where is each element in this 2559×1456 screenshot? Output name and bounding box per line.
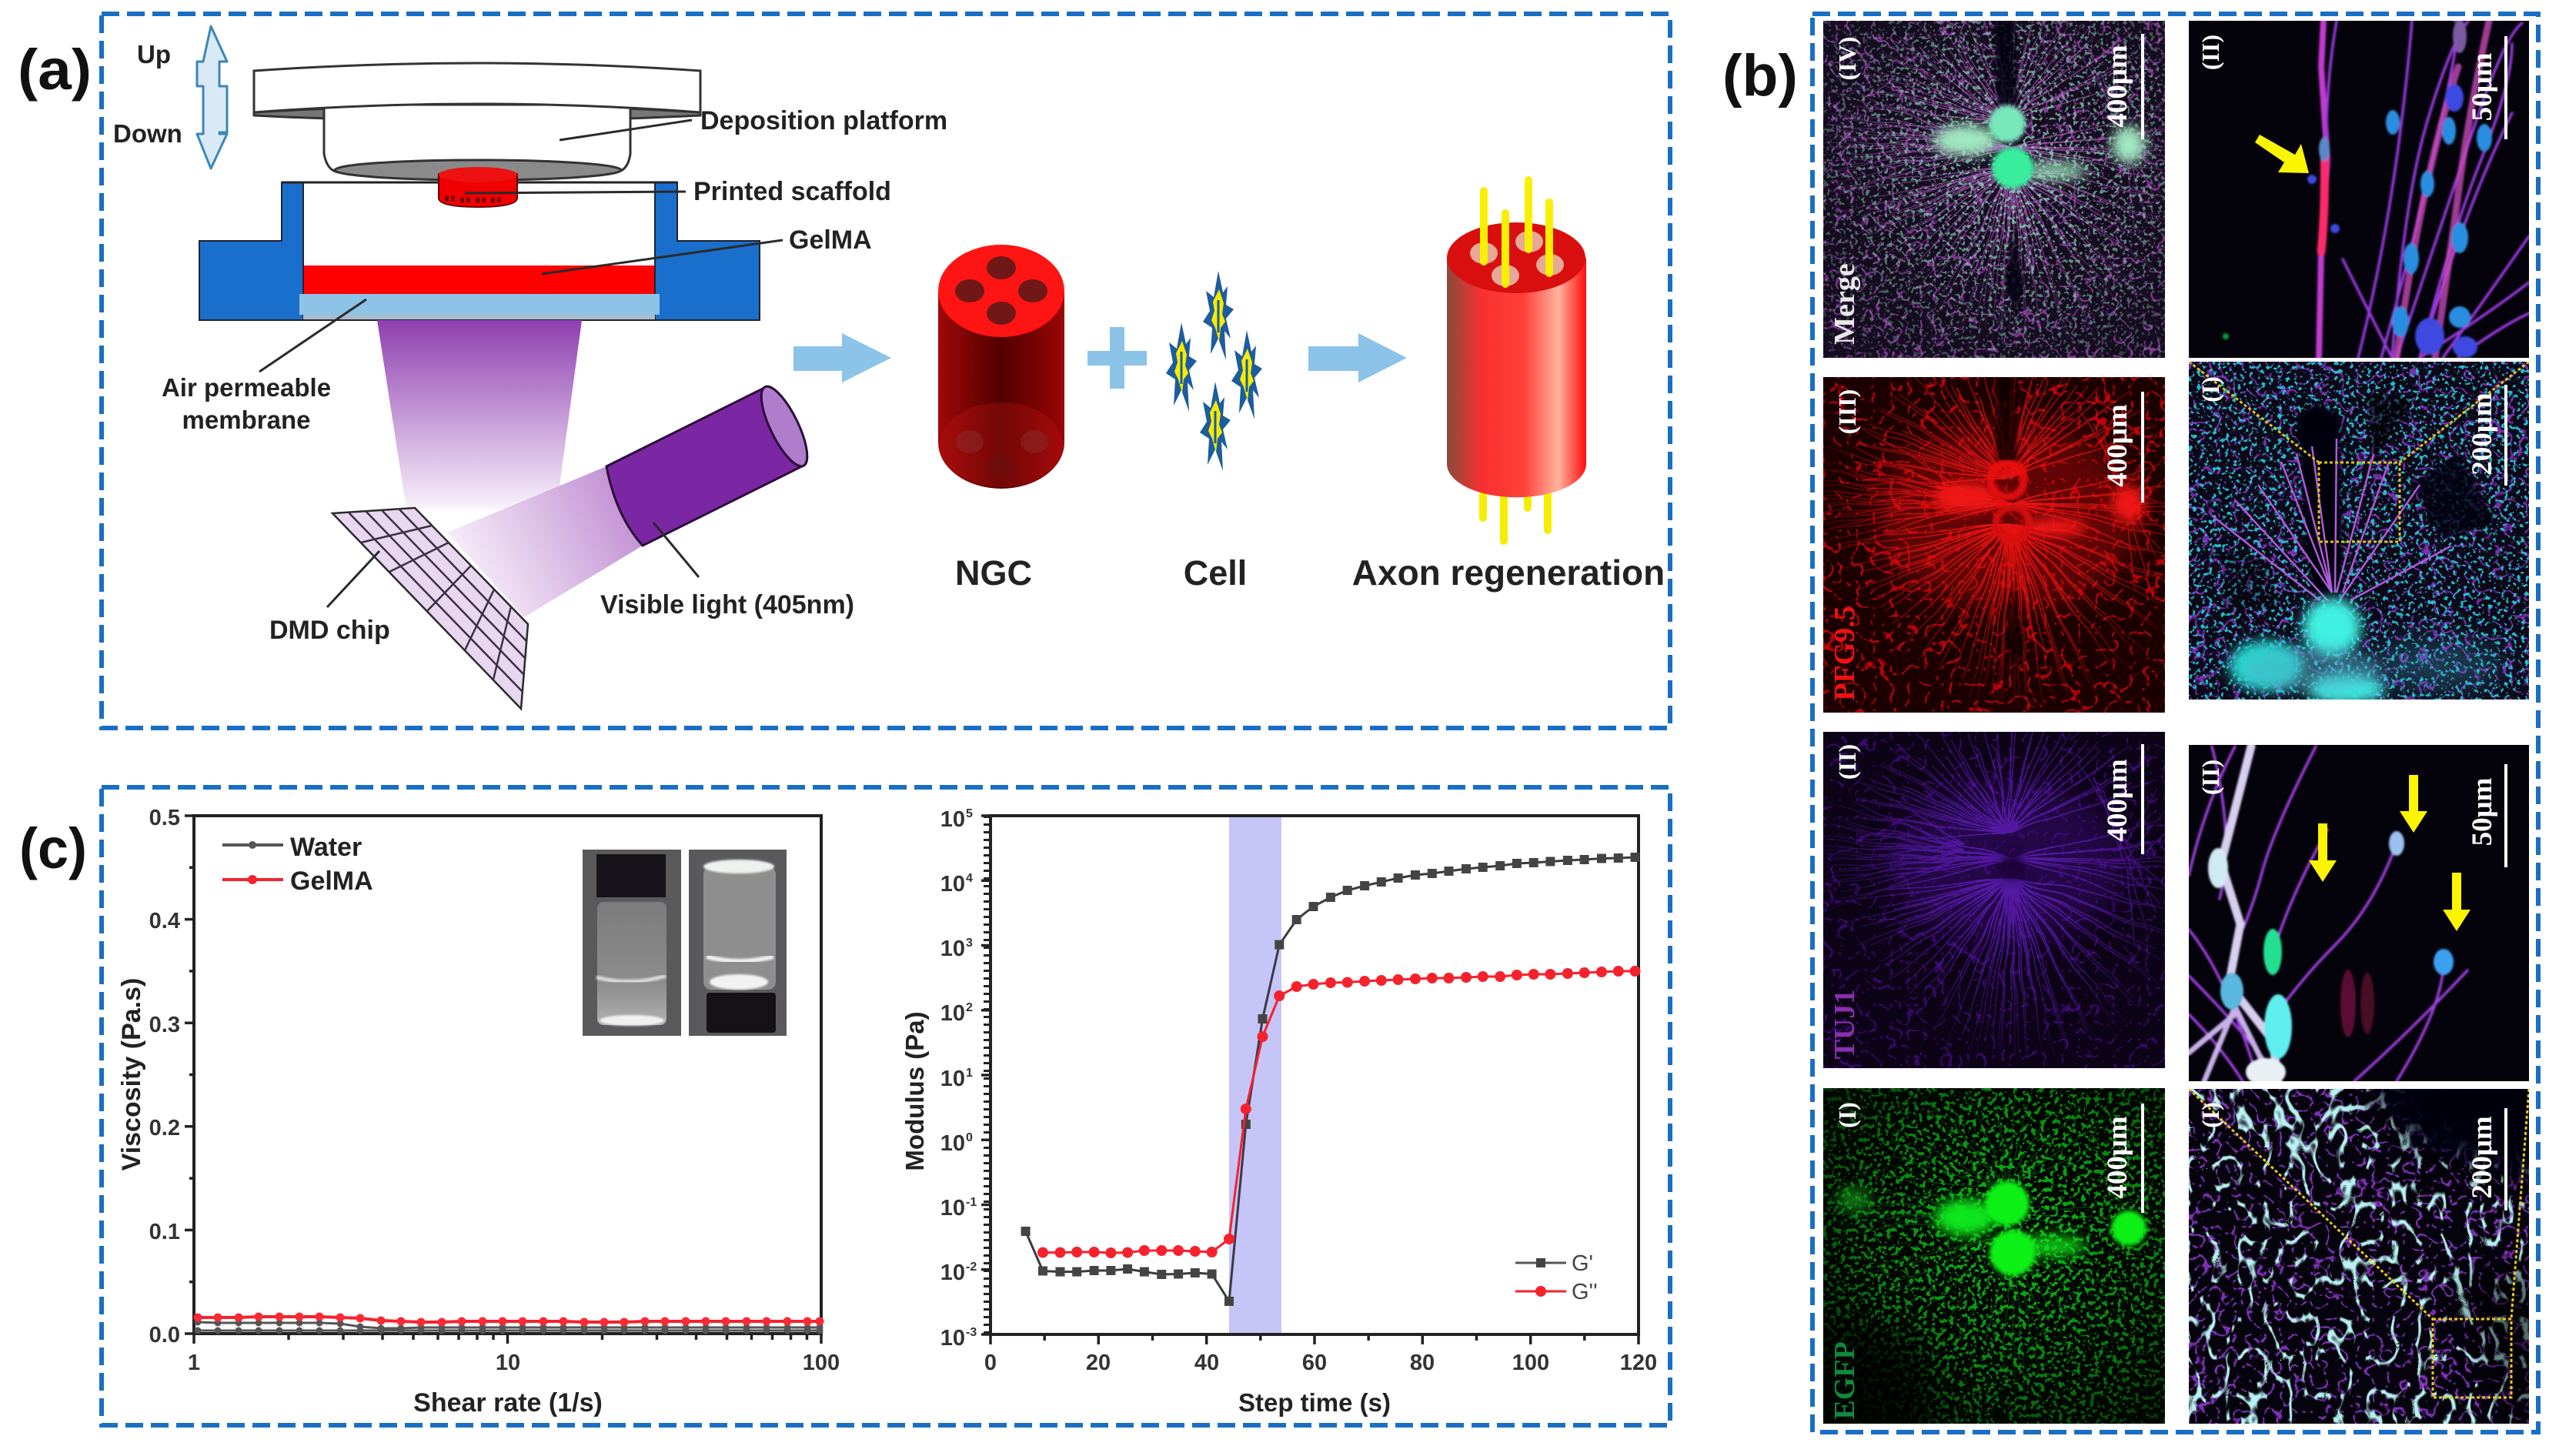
label: Printed scaffold: Printed scaffold	[693, 177, 891, 206]
y tick labels: 10	[940, 1261, 965, 1285]
x tick labels: 60	[1302, 1351, 1327, 1375]
icon: light source cylinder	[606, 381, 816, 546]
arrow 2	[1308, 333, 1407, 382]
y tick labels: 0.5	[149, 806, 180, 830]
panel c: rheology charts	[102, 787, 1670, 1425]
chart: viscosity vs shear rate	[117, 806, 840, 1418]
legend: GelMA: GelMA	[290, 867, 373, 896]
scale text: 200μm	[2467, 392, 2498, 476]
curing shaded band	[1229, 816, 1281, 1334]
scale bar	[2504, 385, 2507, 486]
panel b: fluorescence micrographs	[1799, 0, 2558, 1442]
micrograph: bottom II high magnification	[2189, 745, 2529, 1086]
icon: DMD chip	[332, 508, 528, 709]
micrograph: I EGFP	[1808, 1088, 2165, 1442]
y tick labels: 10	[940, 1067, 965, 1091]
micrograph: top I overview with zoom box	[2189, 362, 2529, 704]
legend: Water: Water	[290, 833, 362, 862]
scale text: 400μm	[2102, 45, 2133, 128]
roman label: (II)	[2197, 35, 2224, 70]
scale text: 400μm	[2102, 1116, 2133, 1199]
label: Visible light: Visible light (405nm)	[600, 590, 854, 619]
scale bar	[2504, 764, 2507, 867]
printed scaffold	[439, 167, 517, 207]
label: Down: Down	[113, 119, 182, 148]
micrograph: III PFG9.5	[1823, 377, 2165, 713]
label: Axon regeneration: Axon regeneration	[1352, 553, 1665, 593]
y tick exponents: 0	[966, 1131, 973, 1144]
legend: G': G'	[1572, 1251, 1593, 1276]
stain label: EGFP: EGFP	[1829, 1341, 1861, 1420]
label: Cell: Cell	[1184, 553, 1247, 593]
y tick exponents: 4	[966, 872, 973, 885]
panel label: (c): (c)	[19, 816, 87, 880]
axis title: viscosity: Viscosity (Pa.s)	[117, 978, 146, 1170]
scale bar	[2141, 1104, 2144, 1213]
x tick labels	[188, 1351, 840, 1375]
light beam from DMD to vat	[377, 320, 582, 509]
x tick labels: 100	[1512, 1351, 1549, 1375]
y tick labels: 0.2	[149, 1116, 180, 1140]
y tick labels	[940, 807, 965, 1351]
inset photo: upright vial	[583, 850, 681, 1036]
series: GelMA	[198, 1317, 820, 1322]
micrograph: II TUJ1	[1823, 732, 2165, 1068]
scale bar	[2504, 1108, 2507, 1211]
icon: cells	[1166, 271, 1262, 471]
micrograph: bottom I overview with zoom box	[2189, 1058, 2558, 1428]
deposition platform	[254, 63, 700, 180]
scale bar	[2504, 36, 2507, 139]
y tick labels: 0.4	[149, 909, 180, 933]
series: water	[198, 1322, 820, 1331]
plus sign	[1087, 327, 1147, 389]
x tick labels: 1	[188, 1351, 200, 1375]
scale text: 50μm	[2467, 52, 2498, 121]
y tick exponents: -2	[966, 1261, 977, 1274]
y tick labels	[149, 806, 180, 1347]
y tick exponents: 2	[966, 1001, 973, 1014]
x tick labels: 0	[984, 1351, 997, 1375]
scale text: 400μm	[2102, 404, 2133, 487]
scale bar	[2141, 34, 2144, 139]
legend: GelMA	[222, 867, 373, 896]
y tick labels: 10	[940, 1131, 965, 1156]
label: GelMA: GelMA	[789, 225, 872, 255]
label: NGC: NGC	[955, 553, 1032, 593]
scale text: 200μm	[2467, 1116, 2498, 1199]
y tick exponents	[966, 807, 977, 1339]
legend: G'	[1515, 1251, 1593, 1276]
dotted zoom box	[2189, 362, 2529, 542]
icon: up/down double arrow	[197, 26, 227, 169]
yellow arrows	[2309, 775, 2470, 931]
y tick labels: 10	[940, 872, 965, 897]
scale bar	[2141, 392, 2144, 503]
x tick labels: 100	[803, 1351, 840, 1375]
label: Up: Up	[137, 40, 171, 68]
legend: Water	[222, 833, 362, 862]
series: G double prime	[1043, 971, 1635, 1253]
x tick labels	[984, 1351, 1657, 1375]
stain label: TUJ1: TUJ1	[1829, 990, 1861, 1059]
label: Air permeable membrane: Air permeable	[162, 373, 331, 402]
chart: modulus vs step time	[900, 807, 1657, 1417]
light beam from source to DMD	[447, 466, 643, 617]
label: DMD chip: DMD chip	[269, 616, 390, 645]
y tick labels: 10	[940, 937, 965, 961]
panel label: (b): (b)	[1722, 43, 1798, 109]
micrograph: IV merge	[1823, 21, 2165, 358]
y tick exponents: 1	[966, 1067, 973, 1080]
y tick labels: 0.0	[149, 1323, 180, 1347]
axon regeneration conduit icon	[1447, 180, 1586, 541]
y tick exponents: 3	[966, 937, 973, 950]
axis title: step time: Step time (s)	[1238, 1388, 1391, 1417]
panel label: (a): (a)	[18, 38, 92, 102]
y tick labels: 0.1	[149, 1220, 180, 1244]
dotted zoom box	[2189, 1089, 2529, 1398]
y tick exponents: -3	[966, 1326, 977, 1339]
y tick labels: 10	[940, 1001, 965, 1026]
axis title: modulus: Modulus (Pa)	[900, 1011, 929, 1171]
legend: G''	[1515, 1280, 1598, 1304]
y tick labels: 10	[940, 1326, 965, 1351]
yellow arrow	[2255, 135, 2309, 173]
inset photo: inverted vial	[689, 850, 787, 1036]
axis title: shear rate: Shear rate (1/s)	[413, 1388, 603, 1418]
label: Deposition platform: Deposition platform	[700, 106, 947, 135]
NGC conduit icon	[938, 245, 1064, 489]
scale text: 400μm	[2102, 759, 2133, 842]
y tick labels: 0.3	[149, 1013, 180, 1037]
roman label: (I)	[2197, 1102, 2224, 1128]
y tick exponents: 5	[966, 807, 973, 820]
roman label: (II)	[2197, 760, 2224, 795]
scale bar	[2141, 744, 2144, 854]
label: Air permeable membrane: membrane	[182, 406, 310, 434]
roman label: (I)	[2197, 376, 2224, 402]
x tick labels: 20	[1086, 1351, 1111, 1375]
stain label: PFG9.5: PFG9.5	[1829, 606, 1861, 701]
roman label: (III)	[1833, 389, 1861, 434]
panel a: printing schematic	[102, 14, 1670, 728]
y tick exponents: -1	[966, 1196, 977, 1209]
x tick labels: 10	[496, 1351, 520, 1375]
roman label: (IV)	[1833, 37, 1861, 80]
roman label: (II)	[1833, 744, 1861, 780]
y tick labels: 10	[940, 807, 965, 832]
scale text: 50μm	[2467, 777, 2498, 846]
micrograph: top II high magnification	[2189, 18, 2529, 358]
vat with GelMA and membrane	[199, 182, 760, 320]
x tick labels: 80	[1410, 1351, 1435, 1375]
series: G prime	[1026, 857, 1635, 1301]
x tick labels: 40	[1194, 1351, 1219, 1375]
x tick labels: 120	[1620, 1351, 1657, 1375]
leader lines	[259, 120, 783, 607]
y tick labels: 10	[940, 1196, 965, 1221]
stain label: Merge: Merge	[1829, 263, 1861, 345]
arrow 1	[793, 333, 891, 382]
legend: G'': G''	[1572, 1280, 1598, 1304]
roman label: (I)	[1833, 1102, 1861, 1128]
